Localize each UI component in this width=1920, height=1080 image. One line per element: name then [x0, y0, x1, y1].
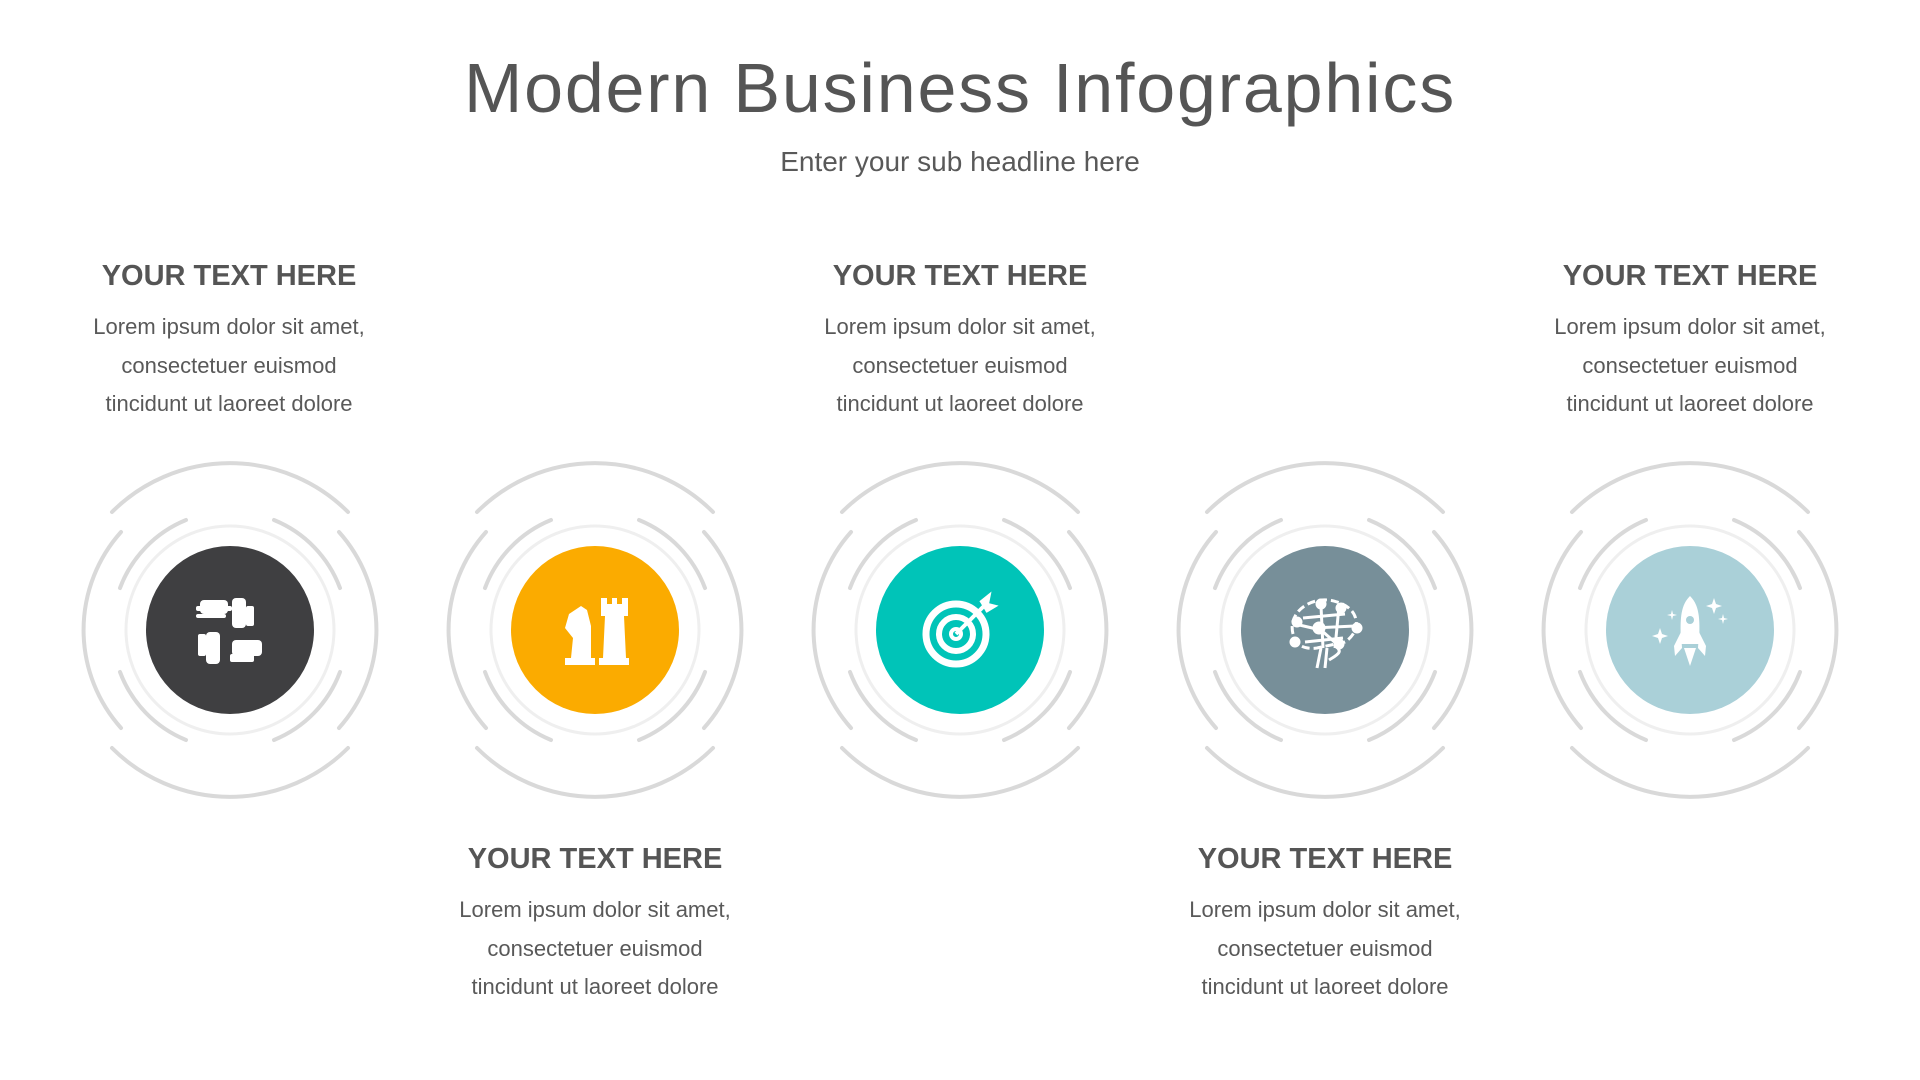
text block 4: tincidunt ut laoreet dolore	[1201, 974, 1449, 999]
icon: target with arrow	[926, 594, 996, 664]
text block 2: Lorem ipsum dolor sit amet,	[459, 897, 731, 922]
text block 3	[824, 260, 1096, 416]
text block 4: consectetuer euismod	[1217, 936, 1433, 960]
text block 1: tincidunt ut laoreet dolore	[105, 391, 353, 416]
text block 2: YOUR TEXT HERE	[468, 843, 722, 875]
icon: brain network	[1291, 600, 1361, 668]
text block 2	[459, 843, 731, 999]
text block 3: YOUR TEXT HERE	[833, 260, 1087, 292]
subtitle: Enter your sub headline here	[780, 146, 1140, 177]
text block 1	[93, 260, 365, 416]
text block 4: YOUR TEXT HERE	[1198, 843, 1452, 875]
text block 1: YOUR TEXT HERE	[102, 260, 356, 292]
text block 3: tincidunt ut laoreet dolore	[836, 391, 1084, 416]
text block 2: consectetuer euismod	[487, 936, 703, 960]
title: Modern Business Infographics	[464, 49, 1456, 127]
text block 5: Lorem ipsum dolor sit amet,	[1554, 314, 1826, 339]
text block 5	[1554, 260, 1826, 416]
text block 5: consectetuer euismod	[1582, 352, 1798, 378]
text block 4: Lorem ipsum dolor sit amet,	[1189, 897, 1461, 922]
text block 2: tincidunt ut laoreet dolore	[471, 974, 719, 999]
text block 1: Lorem ipsum dolor sit amet,	[93, 314, 365, 339]
icon: chess pieces	[565, 598, 629, 665]
circle 3: target	[814, 463, 1106, 797]
circle 5: rocket	[1544, 463, 1836, 797]
circle 2: chess	[449, 463, 741, 797]
text block 3: Lorem ipsum dolor sit amet,	[824, 314, 1096, 339]
text block 1: consectetuer euismod	[121, 352, 337, 378]
icon: hands	[196, 598, 262, 664]
text block 3: consectetuer euismod	[852, 352, 1068, 378]
circle 4: brain	[1179, 463, 1471, 797]
icon: rocket with stars	[1652, 596, 1728, 666]
text block 5: tincidunt ut laoreet dolore	[1566, 391, 1814, 416]
text block 4	[1189, 843, 1461, 999]
circle 1: teamwork hands	[84, 463, 376, 797]
text block 5: YOUR TEXT HERE	[1563, 260, 1817, 292]
